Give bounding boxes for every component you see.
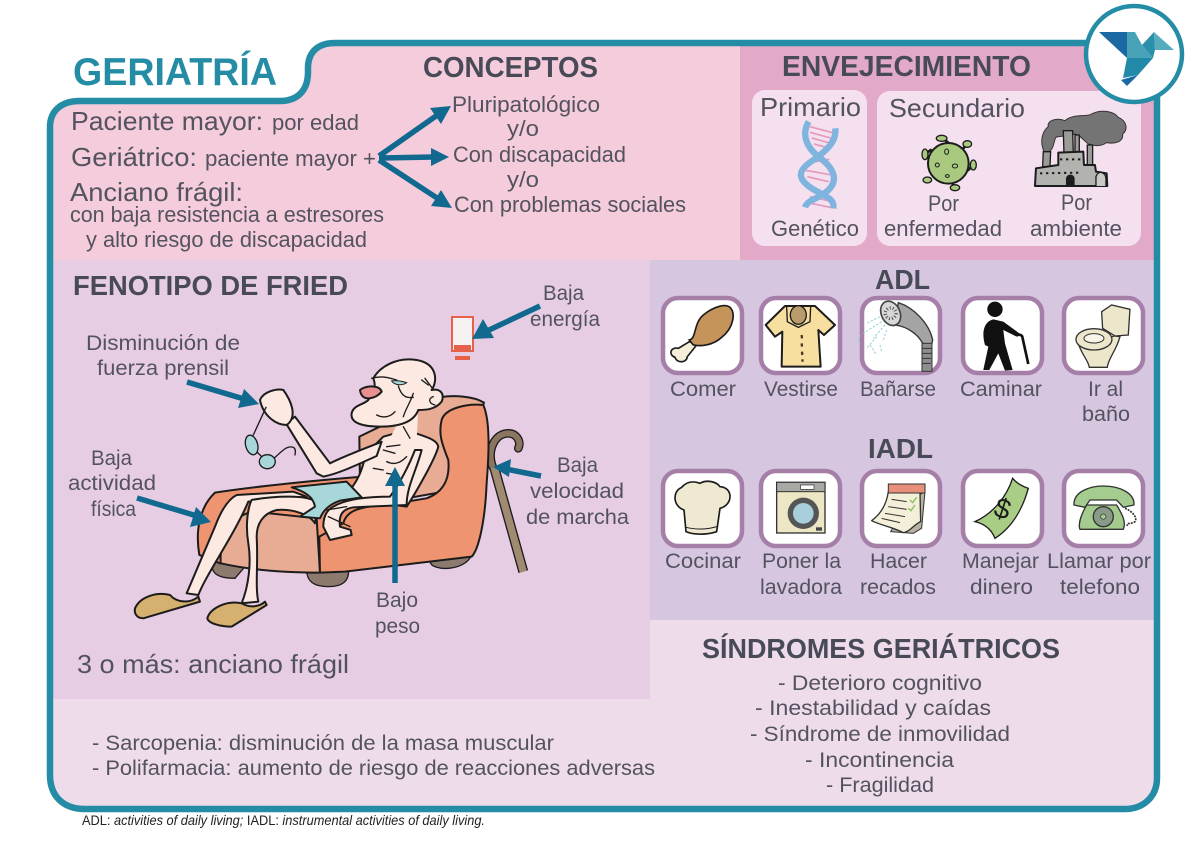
near leg <box>242 497 317 603</box>
labels: IADL: recados <box>860 576 936 599</box>
arrow: fuerza prensil <box>187 382 259 408</box>
label: bajo peso: Bajo <box>376 589 418 612</box>
chair back <box>359 396 484 498</box>
labels: IADL: Manejar <box>962 550 1039 573</box>
seat cushion <box>221 512 320 573</box>
list: sindromes <box>750 672 1010 797</box>
arrow: actividad fisica <box>137 498 211 527</box>
card: primario <box>752 90 867 246</box>
icon: comer <box>663 298 742 373</box>
icon: manejar dinero <box>963 471 1042 546</box>
text: paciente mayor: Paciente mayor: <box>71 106 263 136</box>
icon: manejar dinero: $ <box>990 491 1015 526</box>
panel: ADL <box>663 264 1151 599</box>
arrow: velocidad de marcha <box>493 459 541 477</box>
far leg <box>187 492 307 595</box>
text: sarcopenia and polifarmacia <box>92 732 655 780</box>
label: baja velocidad de marcha: de marcha <box>526 506 629 529</box>
labels: IADL: Cocinar <box>665 550 741 573</box>
chair feet <box>212 555 472 587</box>
label: baja energia: Baja <box>543 282 584 305</box>
text: categories list: Con discapacidad <box>453 142 626 167</box>
card: primario: Genético <box>771 216 859 241</box>
label: baja actividad fisica: Baja <box>91 447 132 470</box>
heading: conceptos: CONCEPTOS <box>423 52 598 84</box>
near arm <box>323 450 422 540</box>
text: anciano fragil: Anciano frágil: <box>70 177 243 207</box>
panel: envejecimiento <box>752 51 1141 246</box>
text: categories list: y/o <box>507 167 539 192</box>
text: sarcopenia and polifarmacia: - Polifarmacia: aumento de riesgo de reacciones adversas <box>92 757 655 780</box>
heading: envejecimiento: ENVEJECIMIENTO <box>782 51 1031 83</box>
nose <box>360 386 382 398</box>
hand <box>260 390 293 425</box>
labels: ADL: Bañarse <box>860 378 936 401</box>
labels: ADL: baño <box>1082 403 1130 426</box>
card: secundario: ambiente <box>1030 216 1122 241</box>
labels: ADL: Ir al <box>1088 378 1123 401</box>
icon: virus <box>922 135 976 191</box>
icon: ir al bano <box>1064 298 1143 373</box>
text: categories list: Pluripatológico <box>452 92 600 117</box>
heading: fenotipo: FENOTIPO DE FRIED <box>73 270 348 301</box>
list: sindromes: - Fragilidad <box>826 774 934 797</box>
text: geriatrico <box>71 142 376 172</box>
text: sarcopenia and polifarmacia: - Sarcopenia: disminución de la masa muscular <box>92 732 554 755</box>
slippers <box>135 594 267 627</box>
label: baja velocidad de marcha <box>526 454 629 529</box>
labels: IADL: Hacer <box>870 550 927 573</box>
illustration: frail old man in armchair <box>135 359 523 627</box>
text: categories list: Con problemas sociales <box>454 192 686 217</box>
labels: IADL <box>665 550 1151 599</box>
card: primario: Primario <box>760 92 861 122</box>
labels: ADL: Vestirse <box>764 378 838 401</box>
list: sindromes: - Deterioro cognitivo <box>778 672 982 695</box>
footnote: ADL: activities of daily living; IADL: instrumental activities of daily living. <box>82 812 485 828</box>
shorts <box>292 482 362 518</box>
card: secundario: Secundario <box>889 93 1025 123</box>
label: bajo peso: peso <box>375 615 420 638</box>
label: disminucion de fuerza prensil: Disminución de <box>86 332 240 355</box>
raised arm <box>286 417 382 477</box>
text: geriatrico: paciente mayor + <box>205 146 376 171</box>
icon: low battery <box>452 317 473 360</box>
card: secundario: Por <box>928 191 959 216</box>
text: paciente mayor <box>71 106 359 136</box>
head <box>352 359 443 427</box>
text: paciente mayor: por edad <box>272 110 359 135</box>
list: sindromes: - Síndrome de inmovilidad <box>750 723 1010 746</box>
panel: fenotipo de fried <box>68 270 629 679</box>
card: secundario: enfermedad <box>884 216 1002 241</box>
text: anciano fragil: con baja resistencia a estresores <box>70 202 384 227</box>
text: 3 o mas: 3 o más: anciano frágil <box>77 649 349 679</box>
eye <box>392 381 407 385</box>
label: baja actividad fisica <box>68 447 156 521</box>
labels: IADL: lavadora <box>760 576 842 599</box>
panel: sindromes geriatricos <box>702 633 1060 797</box>
torso <box>350 430 438 507</box>
icon: hacer recados <box>862 471 940 546</box>
chair near arm <box>319 405 489 573</box>
label: disminucion de fuerza prensil: fuerza prensil <box>97 357 229 380</box>
icon: caminar <box>963 298 1042 373</box>
icon: DNA <box>801 122 835 208</box>
label: disminucion de fuerza prensil <box>86 332 240 380</box>
neck <box>390 410 418 440</box>
label: baja energia <box>530 282 600 331</box>
icon: cocinar <box>663 471 742 546</box>
icon: llamar por telefono <box>1064 471 1143 546</box>
label: baja velocidad de marcha: Baja <box>557 454 598 477</box>
text: categories list <box>452 92 686 217</box>
cane <box>491 433 523 572</box>
card: secundario <box>877 91 1141 246</box>
chair seat back strip <box>198 477 387 570</box>
text: geriatrico: Geriátrico: <box>71 142 197 172</box>
labels: IADL: Poner la <box>762 550 841 573</box>
text: categories list: y/o <box>507 116 539 141</box>
arrow: baja energia <box>472 306 540 339</box>
icon: vestirse <box>761 298 840 373</box>
arrows: conceptos branching <box>379 106 452 208</box>
heading: IADL: IADL <box>868 433 933 464</box>
label: bajo peso <box>375 589 420 638</box>
icon: lavadora <box>761 471 840 546</box>
heading: ADL: ADL <box>875 264 930 295</box>
labels: ADL: Comer <box>670 378 736 401</box>
label: baja energia: energía <box>530 308 600 331</box>
text: anciano fragil <box>70 177 384 252</box>
heading: sindromes: SÍNDROMES GERIÁTRICOS <box>702 633 1060 664</box>
labels: IADL: telefono <box>1060 576 1140 599</box>
labels: ADL: Caminar <box>960 378 1042 401</box>
icon: banarse <box>858 298 940 373</box>
face and chest details <box>327 377 435 527</box>
title: GERIATRÍA <box>73 50 277 94</box>
list: sindromes: - Incontinencia <box>805 749 954 772</box>
icon: logo bird <box>1086 6 1182 102</box>
glasses <box>243 407 295 469</box>
labels: IADL: Llamar por <box>1047 550 1151 573</box>
panel: conceptos <box>70 52 686 252</box>
list: sindromes: - Inestabilidad y caídas <box>755 697 991 720</box>
label: baja actividad fisica: actividad <box>68 472 156 495</box>
label: baja actividad fisica: física <box>91 498 136 521</box>
arrow: bajo peso <box>385 467 405 583</box>
icon: factory <box>1035 111 1126 186</box>
labels: IADL: dinero <box>970 576 1033 599</box>
text: anciano fragil: y alto riesgo de discapacidad <box>86 227 367 252</box>
card: secundario: Por <box>1061 190 1092 215</box>
labels: ADL <box>670 378 1130 426</box>
label: baja velocidad de marcha: velocidad <box>530 480 624 503</box>
